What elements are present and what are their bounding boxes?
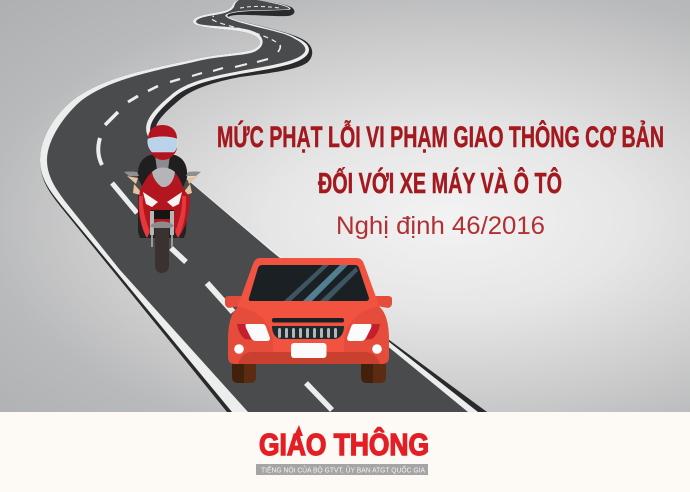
logo wordmark: GIAO THÔNG bbox=[259, 426, 429, 462]
grille bbox=[272, 326, 344, 339]
windscreen bbox=[152, 168, 175, 187]
rear wheel and tyre bbox=[155, 222, 169, 273]
body bbox=[228, 306, 389, 364]
fog lamps bbox=[234, 344, 382, 354]
title bbox=[217, 120, 664, 200]
cabin bbox=[237, 258, 380, 308]
hood vent bbox=[272, 318, 344, 322]
grille bars bbox=[278, 328, 337, 338]
motorbike with rider bbox=[124, 125, 201, 273]
logo tagline: TIẾNG NÓI CỦA BỘ GTVT, ỦY BAN ATGT QUỐC GIA bbox=[261, 464, 425, 474]
hands bbox=[127, 176, 198, 195]
visor bbox=[148, 137, 177, 152]
helmet bbox=[148, 125, 177, 160]
side highlights bbox=[139, 196, 186, 238]
road centre dashes bbox=[98, 6, 332, 410]
wheels bbox=[232, 360, 386, 383]
hood bbox=[238, 306, 378, 352]
rider legs bbox=[138, 190, 188, 238]
red indicators bbox=[237, 324, 380, 340]
footer band bbox=[0, 412, 690, 492]
headlights bbox=[143, 192, 182, 207]
lower bumper bbox=[238, 352, 380, 364]
number plate bbox=[291, 343, 326, 358]
car bbox=[225, 258, 392, 383]
fairing bbox=[138, 170, 190, 238]
headlights bbox=[246, 324, 372, 341]
front fork and guard bbox=[150, 210, 174, 247]
side mirrors bbox=[225, 296, 242, 308]
left mirror bbox=[124, 172, 139, 176]
title: ĐỐI VỚI XE MÁY VÀ Ô TÔ bbox=[318, 166, 562, 200]
logo swoosh bbox=[294, 425, 303, 436]
logo tagline bar bbox=[256, 464, 428, 475]
right mirror bbox=[186, 172, 201, 176]
logo bbox=[256, 425, 429, 475]
neck bbox=[155, 155, 170, 170]
windscreen bbox=[249, 265, 369, 301]
subtitle: Nghị định 46/2016 bbox=[336, 212, 545, 240]
rider torso bbox=[138, 155, 187, 190]
road bbox=[40, 0, 487, 412]
windscreen reflections bbox=[284, 265, 358, 301]
